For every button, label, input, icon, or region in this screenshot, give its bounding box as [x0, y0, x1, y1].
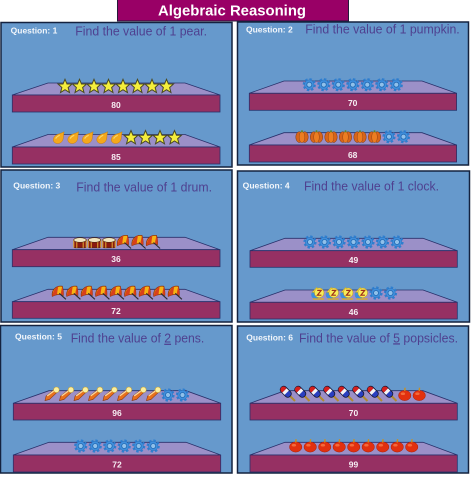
panel: question 3 [1, 170, 232, 322]
prompt 4: Find the value of 1 clock. [304, 180, 439, 194]
top scale 4: 49 [349, 255, 358, 265]
panel: question 4 [238, 171, 470, 322]
bottom scale 2: 68 [348, 150, 358, 160]
bottom scale 6: 99 [349, 460, 358, 470]
bottom scale 1 [12, 131, 220, 164]
prompt 5: Find the value of 2 pens. [71, 332, 204, 346]
top scale 6: 70 [349, 408, 358, 418]
top scale 3 [12, 235, 220, 267]
title banner [118, 0, 348, 21]
question label 2: Question: 2 [246, 25, 293, 34]
top scale 6 [250, 385, 457, 420]
panel: question 1 [1, 22, 232, 167]
bottom scale 4 [250, 287, 457, 319]
bottom scale 3: 72 [111, 306, 121, 316]
prompt 3: Find the value of 1 drum. [76, 180, 212, 194]
bottom scale 6 [250, 439, 457, 472]
question label 3: Question: 3 [13, 182, 61, 191]
prompt 2: Find the value of 1 pumpkin. [305, 22, 460, 36]
question label 6: Question: 6 [246, 334, 294, 343]
top scale 2: 70 [348, 98, 358, 108]
top scale 4 [250, 236, 457, 267]
question label 5: Question: 5 [15, 333, 63, 342]
top scale 2 [249, 79, 457, 110]
bottom scale 2 [249, 130, 457, 162]
question label 1: Question: 1 [11, 27, 58, 36]
prompt 1: Find the value of 1 pear. [75, 25, 207, 39]
panel: question 2 [238, 22, 468, 165]
title banner: Algebraic Reasoning [158, 3, 306, 20]
bottom scale 5: 72 [112, 460, 122, 470]
panel: question 5 [0, 326, 232, 473]
prompt 6: Find the value of 5 popsicles. [299, 331, 458, 345]
question label 4: Question: 4 [243, 182, 290, 191]
top scale 5 [13, 387, 221, 420]
bottom scale 1: 85 [111, 152, 121, 162]
bottom scale 3 [12, 286, 220, 318]
bottom scale 5 [13, 440, 221, 472]
top scale 1 [12, 79, 220, 112]
top scale 3: 36 [111, 254, 121, 264]
top scale 1: 80 [111, 100, 121, 110]
panel: question 6 [238, 326, 468, 473]
top scale 5: 96 [112, 408, 122, 418]
bottom scale 4: 46 [349, 307, 358, 317]
